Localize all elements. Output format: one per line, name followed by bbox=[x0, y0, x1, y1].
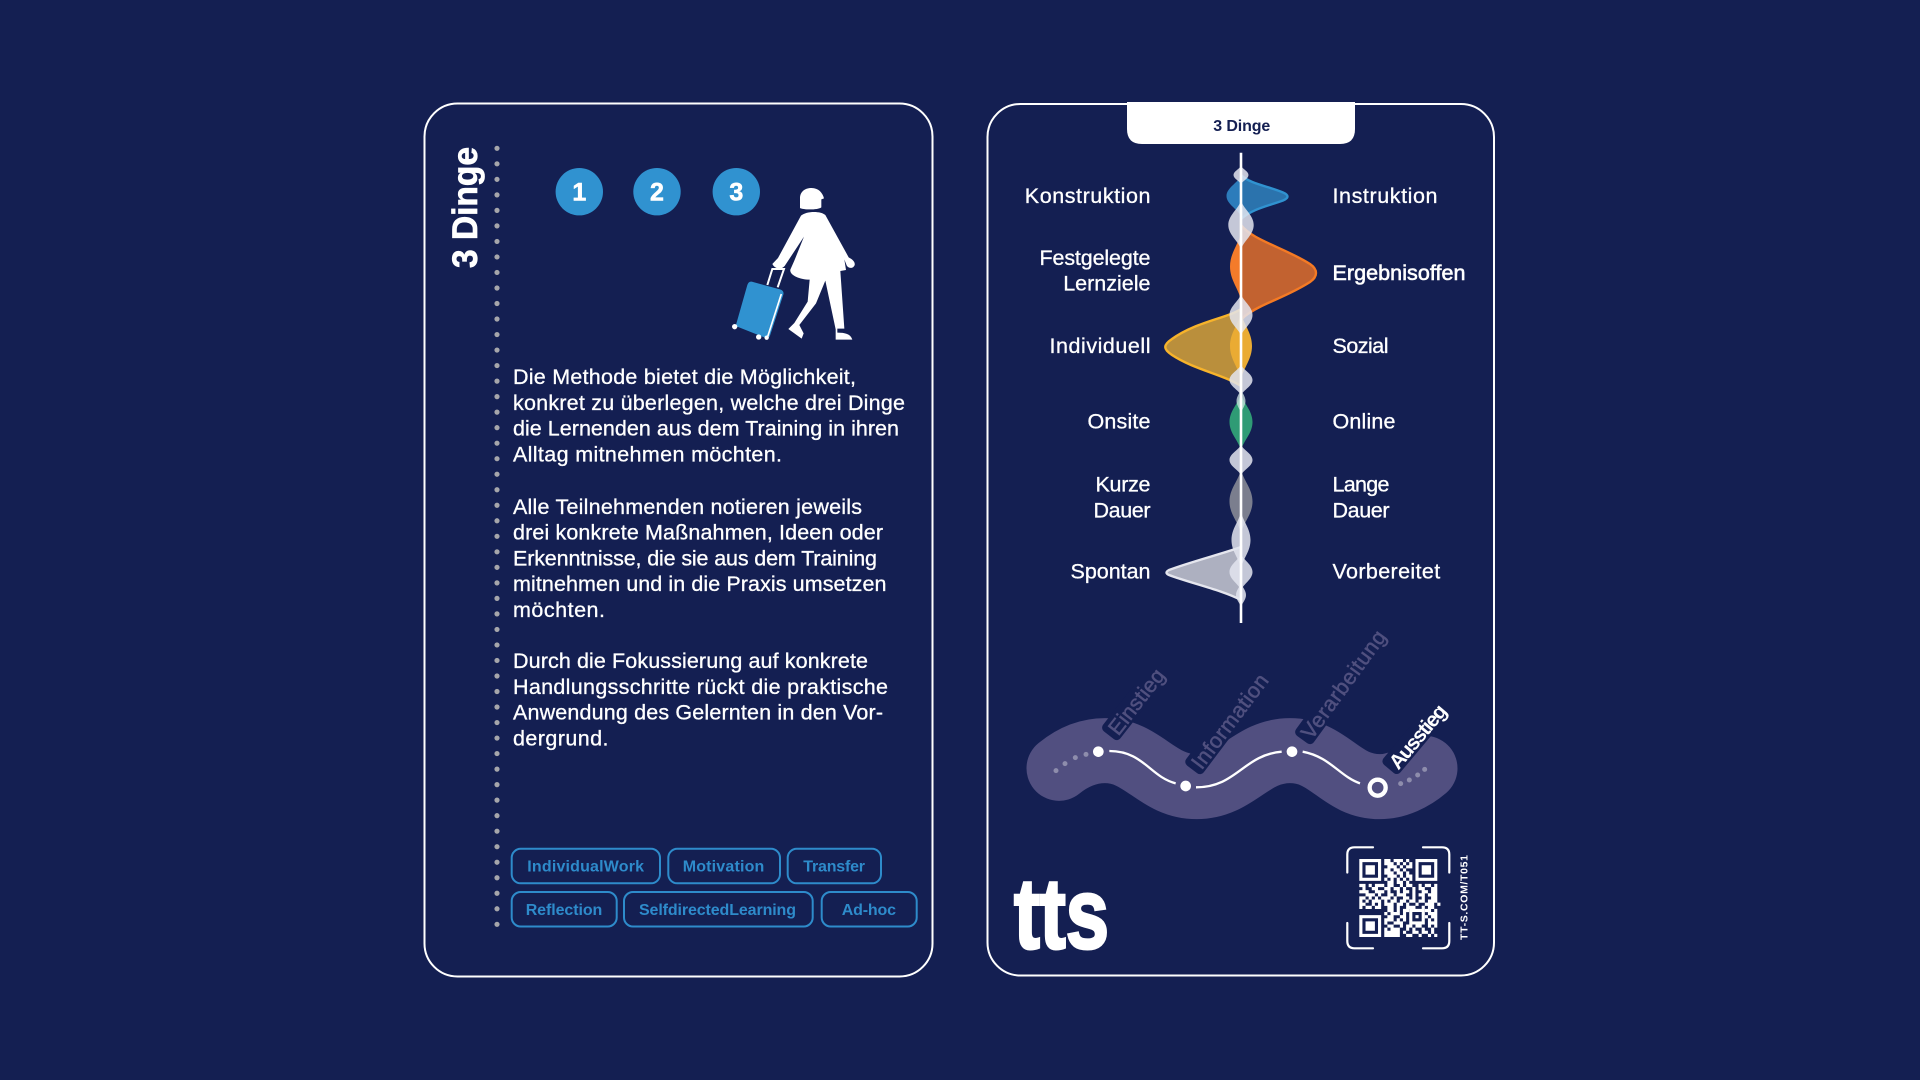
right scale labels: Lange bbox=[1332, 473, 1390, 497]
text block: paragraph 3 bbox=[513, 649, 888, 750]
icon: walking person with suitcase bbox=[732, 188, 855, 340]
tags: Transfer bbox=[803, 859, 865, 876]
tags: IndividualWork bbox=[527, 859, 644, 876]
left scale labels: Konstruktion bbox=[1025, 184, 1150, 208]
left scale labels: Lernziele bbox=[1063, 272, 1150, 296]
right scale labels: Sozial bbox=[1332, 334, 1388, 358]
logo: tts: tts bbox=[1014, 858, 1109, 970]
timeline: training phases: Information bbox=[1186, 669, 1273, 774]
text block: paragraph 3: Durch die Fokussierung auf konkrete bbox=[513, 649, 868, 673]
left scale labels: Dauer bbox=[1094, 498, 1150, 522]
text block: paragraph 1 bbox=[513, 365, 905, 466]
text block: paragraph 2: drei konkrete Maßnahmen, Ideen oder bbox=[513, 520, 883, 544]
tab heading: 3 Dinge bbox=[1213, 118, 1270, 135]
timeline: training phases: Verarbeitung bbox=[1296, 626, 1391, 744]
number badges bbox=[556, 168, 760, 215]
left scale labels: Onsite bbox=[1088, 409, 1150, 433]
text block: paragraph 1: Die Methode bietet die Möglichkeit, bbox=[513, 365, 856, 389]
tags: Reflection bbox=[526, 902, 602, 919]
text block: paragraph 1: Alltag mitnehmen möchten. bbox=[513, 442, 782, 466]
right scale labels: Ergebnisoffen bbox=[1332, 261, 1466, 285]
panel: profile card bbox=[988, 102, 1494, 976]
tags: Motivation bbox=[683, 859, 764, 876]
timeline: training phases bbox=[1053, 626, 1452, 796]
text block: paragraph 2: Erkenntnisse, die sie aus dem Training bbox=[513, 546, 877, 570]
text block: paragraph 1: die Lernenden aus dem Training in ihren bbox=[513, 417, 899, 441]
url label: TT-S.COM/T051 bbox=[1459, 855, 1471, 940]
right scale labels bbox=[1332, 184, 1466, 583]
text block: paragraph 2: mitnehmen und in die Praxis umsetzen bbox=[513, 572, 886, 596]
panel: method description card bbox=[424, 104, 932, 976]
tags: SelfdirectedLearning bbox=[639, 902, 796, 919]
violin chart: method profile bbox=[1165, 153, 1316, 623]
number badges: 1 bbox=[572, 178, 586, 206]
timeline: training phases: Ausstieg bbox=[1385, 700, 1452, 774]
QR code with corner brackets bbox=[1347, 847, 1449, 948]
right scale labels: Vorbereitet bbox=[1332, 559, 1440, 583]
left scale labels bbox=[1025, 184, 1150, 583]
text block: paragraph 3: Handlungsschritte rückt die praktische bbox=[513, 675, 888, 699]
right scale labels: Dauer bbox=[1332, 498, 1390, 522]
text block: paragraph 1: konkret zu überlegen, welche drei Dinge bbox=[513, 391, 905, 415]
number badges: 2 bbox=[650, 178, 664, 206]
vertical title: 3 Dinge bbox=[446, 147, 485, 268]
number badges: 3 bbox=[729, 178, 743, 206]
text block: paragraph 3: Anwendung des Gelernten in den Vor- bbox=[513, 701, 883, 725]
left scale labels: Spontan bbox=[1070, 559, 1150, 583]
right scale labels: Instruktion bbox=[1332, 184, 1438, 208]
left scale labels: Individuell bbox=[1050, 334, 1150, 358]
tab heading bbox=[1127, 102, 1355, 144]
text block: paragraph 2: Alle Teilnehmenden notieren jeweils bbox=[513, 495, 862, 519]
text block: paragraph 2 bbox=[513, 495, 886, 622]
text block: paragraph 2: möchten. bbox=[513, 598, 605, 622]
right scale labels: Online bbox=[1332, 409, 1396, 433]
tags bbox=[512, 849, 917, 926]
timeline: training phases: Einstieg bbox=[1103, 664, 1170, 740]
tags: Ad-hoc bbox=[842, 902, 896, 919]
left scale labels: Festgelegte bbox=[1040, 246, 1150, 270]
left scale labels: Kurze bbox=[1096, 473, 1150, 497]
text block: paragraph 3: dergrund. bbox=[513, 726, 608, 750]
